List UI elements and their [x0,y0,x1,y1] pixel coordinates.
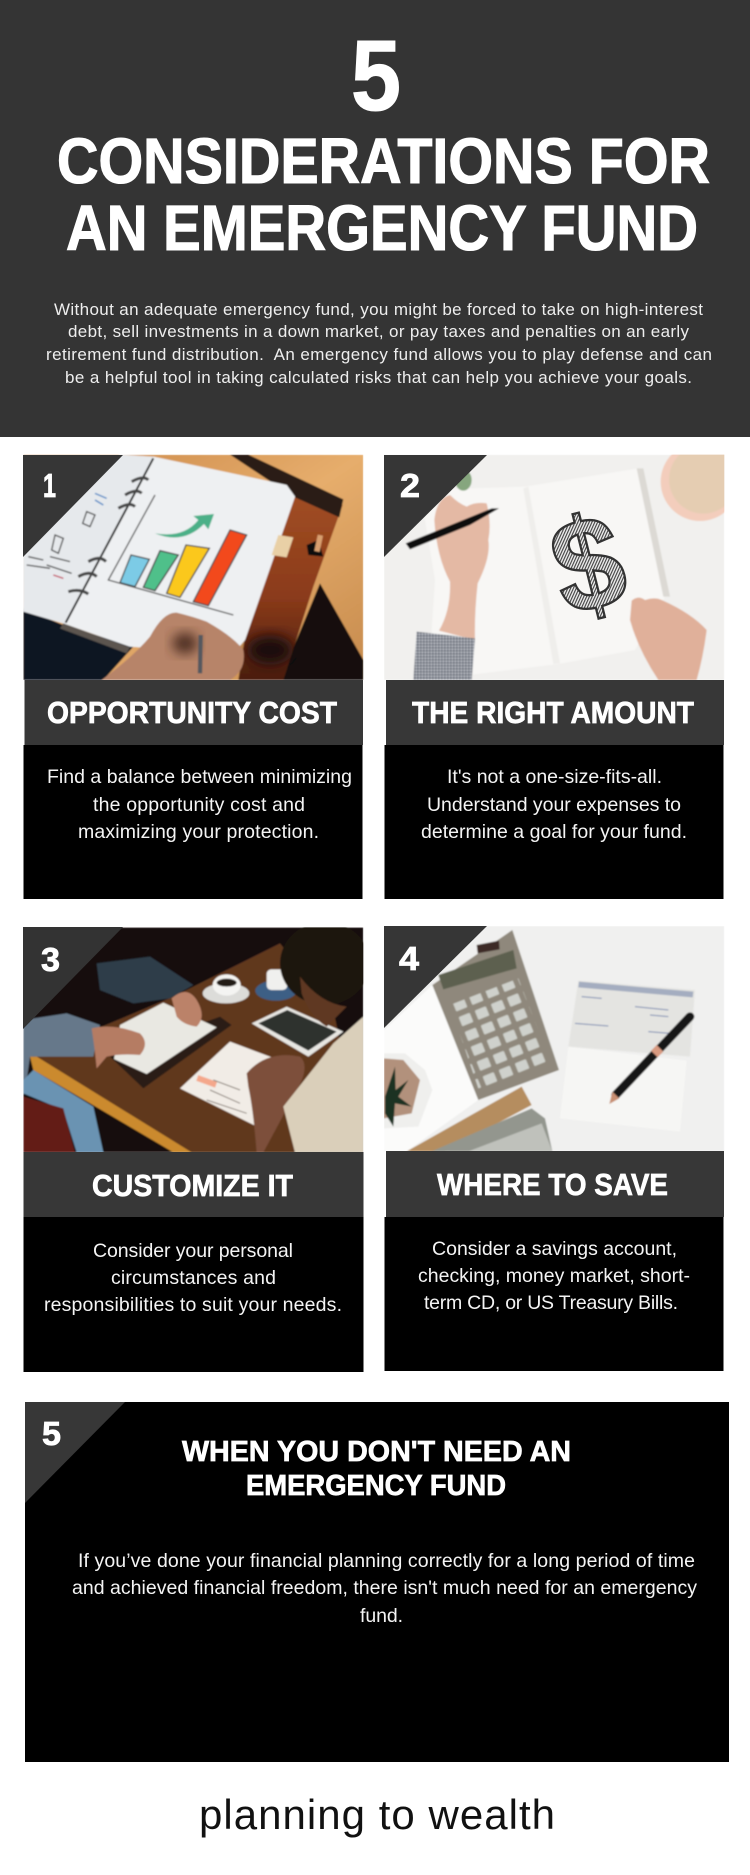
main title [57,125,710,264]
description: It's not a one-size-fits-all. [447,766,662,788]
description: Find a balance between minimizing [47,766,352,788]
dollar sign: $ [537,485,639,645]
logo wordmark: planning to wealth [199,1791,555,1838]
header panel [0,0,750,437]
number 2 corner tab: 2 [400,467,420,504]
description: fund. [360,1605,403,1627]
heading band: WHERE TO SAVE [437,1168,668,1202]
panel: card 2 the right amount [384,442,739,899]
description [384,1217,724,1371]
heading band [24,680,363,745]
big number five: 5 [351,20,401,132]
description: Consider a savings account, [432,1238,677,1260]
description: Consider your personal [93,1240,293,1262]
heading band [386,1151,724,1217]
number 3 corner tab [23,927,123,1029]
number 5 corner tab: 5 [42,1415,61,1452]
description: and achieved financial freedom, there isn't much need for an emergency [72,1577,697,1599]
intro paragraph: retirement fund distribution. An emergency fund allows you to play defense and can [46,345,712,364]
intro paragraph: Without an adequate emergency fund, you might be forced to take on high-interest [54,300,703,319]
heading band [386,680,724,745]
description: term CD, or US Treasury Bills. [424,1292,678,1314]
description [72,1550,697,1627]
number 4 corner tab [384,926,487,1028]
description: If you’ve done your financial planning correctly for a long period of time [78,1550,695,1572]
number 5 corner tab [25,1402,125,1503]
description [24,745,362,899]
heading: WHEN YOU DON'T NEED AN [182,1436,571,1468]
heading band [24,1152,364,1217]
heading band: THE RIGHT AMOUNT [412,696,694,730]
intro paragraph: debt, sell investments in a down market, or pay taxes and penalties on an early [68,322,690,341]
photo: calculator, checkbook and pen [384,926,724,1151]
number 1 corner tab: 1 [43,467,56,504]
description: circumstances and [111,1267,276,1289]
intro paragraph [46,300,712,387]
description: maximizing your protection. [78,821,319,843]
photo: people at table with notebooks [23,922,370,1152]
panel: card 5 when you don't need an emergency fund [25,1402,729,1762]
number 2 corner tab [384,455,487,557]
heading: EMERGENCY FUND [246,1470,506,1502]
panel: card 1 opportunity cost [23,455,363,899]
description [384,745,724,899]
photo: notebook with bar chart [23,455,363,680]
heading [182,1436,571,1502]
photo: hands drawing dollar sign [384,442,739,680]
number 3 corner tab: 3 [41,941,60,978]
heading band: CUSTOMIZE IT [92,1169,293,1203]
description: Understand your expenses to [427,794,681,816]
intro paragraph: be a helpful tool in taking calculated risks that can help you achieve your goals. [65,368,692,387]
number 1 corner tab [23,455,123,557]
description: checking, money market, short- [418,1265,690,1287]
description: responsibilities to suit your needs. [44,1294,342,1316]
description: determine a goal for your fund. [421,821,687,843]
panel: card 3 customize it [23,922,370,1372]
panel: card 4 where to save [384,926,724,1371]
number 4 corner tab: 4 [399,940,420,977]
description [24,1217,364,1372]
heading band: OPPORTUNITY COST [47,696,337,730]
description: the opportunity cost and [93,794,305,816]
